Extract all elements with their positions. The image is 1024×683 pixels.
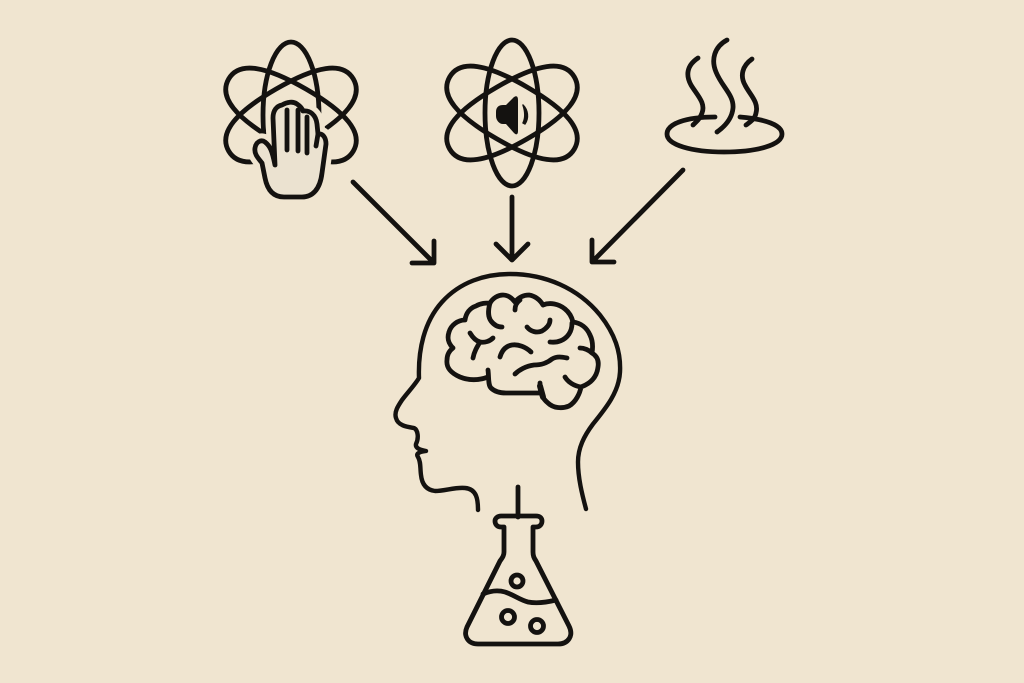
icon: heat or smell rising from dish <box>667 40 782 152</box>
arrow: heat to brain <box>592 170 683 262</box>
icon: atom with speaker (sound) <box>435 40 589 186</box>
bubbles <box>502 575 544 632</box>
liquid level <box>483 591 556 603</box>
arrow: sound to brain <box>496 197 528 260</box>
head profile <box>395 274 620 510</box>
icon: hand <box>255 102 326 197</box>
arrow: touch to brain <box>353 182 434 263</box>
icon: atom with hand (touch) <box>214 42 368 197</box>
connector: head to flask <box>516 487 520 517</box>
icon: conical flask <box>466 516 571 644</box>
brain <box>447 295 598 408</box>
icon: speaker <box>496 96 527 134</box>
